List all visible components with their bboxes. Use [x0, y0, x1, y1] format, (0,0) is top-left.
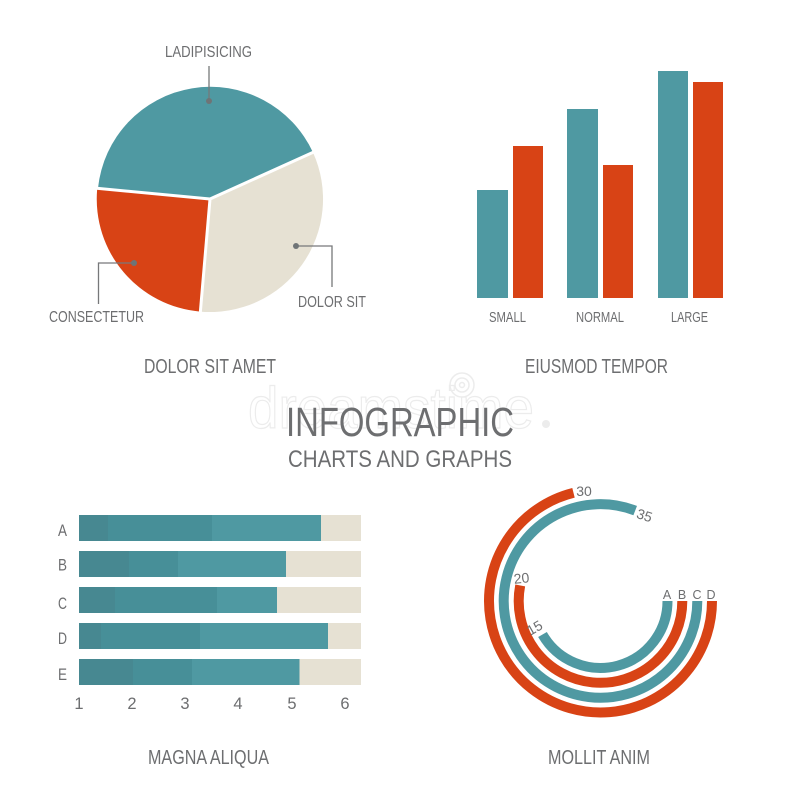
axis numbers: 1	[74, 695, 84, 713]
row A	[58, 515, 361, 541]
arc value labels: 35	[635, 505, 655, 525]
axis numbers: 6	[340, 695, 350, 713]
bar labels: SMALL	[489, 310, 526, 326]
callout: consectetur: CONSECTETUR	[49, 309, 144, 326]
axis numbers: 2	[127, 695, 137, 713]
title	[286, 399, 514, 473]
arc B	[519, 585, 682, 683]
callout: consectetur	[49, 260, 144, 326]
panel: pie chart	[49, 44, 366, 378]
bars: normal	[567, 109, 633, 298]
pie slice: beige	[200, 152, 323, 312]
arc letter labels: D	[706, 588, 716, 602]
row B	[58, 551, 361, 577]
bar labels: LARGE	[671, 310, 708, 326]
axis numbers	[74, 695, 350, 713]
panel: bar chart	[477, 71, 723, 378]
arc letter labels: B	[678, 588, 686, 602]
row A: A	[58, 522, 67, 540]
heading: eiusmod tempor: EIUSMOD TEMPOR	[525, 356, 668, 378]
title: CHARTS AND GRAPHS	[288, 446, 512, 473]
arc value labels: 15	[524, 617, 545, 638]
bar labels: NORMAL	[576, 310, 624, 326]
arc value labels: 20	[513, 569, 530, 587]
arc D	[489, 493, 712, 712]
callout: dolor sit	[293, 243, 366, 311]
row C	[58, 587, 361, 613]
bar labels	[489, 310, 708, 326]
pie slice: red	[97, 188, 210, 312]
arc value labels	[513, 483, 655, 638]
arc value labels: 30	[576, 483, 592, 499]
axis numbers: 4	[233, 695, 243, 713]
callout: ladipisicing: LADIPISICING	[165, 44, 252, 61]
bars: large	[658, 71, 723, 298]
row B: B	[58, 556, 67, 574]
heading: dolor sit amet: DOLOR SIT AMET	[144, 356, 276, 378]
row D	[58, 623, 361, 649]
callout: ladipisicing	[165, 44, 252, 104]
heading: magna aliqua: MAGNA ALIQUA	[148, 747, 270, 769]
row E	[58, 659, 361, 685]
pie slice: teal	[98, 87, 313, 199]
title: INFOGRAPHIC	[286, 399, 514, 445]
row E: E	[58, 666, 67, 684]
axis numbers: 3	[180, 695, 190, 713]
panel: stacked bar chart	[58, 515, 361, 769]
arc letter labels	[663, 588, 716, 602]
bars: small	[477, 146, 543, 298]
arc letter labels: C	[692, 588, 702, 602]
heading: mollit anim: MOLLIT ANIM	[548, 747, 650, 769]
arc letter labels: A	[663, 588, 672, 602]
axis numbers: 5	[287, 695, 297, 713]
arc C	[504, 504, 697, 698]
row C: C	[58, 595, 67, 613]
callout: dolor sit: DOLOR SIT	[298, 294, 366, 311]
arc A	[542, 601, 668, 668]
watermark: dreamstime	[248, 376, 534, 441]
panel: radial bar chart	[489, 483, 716, 769]
row D: D	[58, 630, 67, 648]
